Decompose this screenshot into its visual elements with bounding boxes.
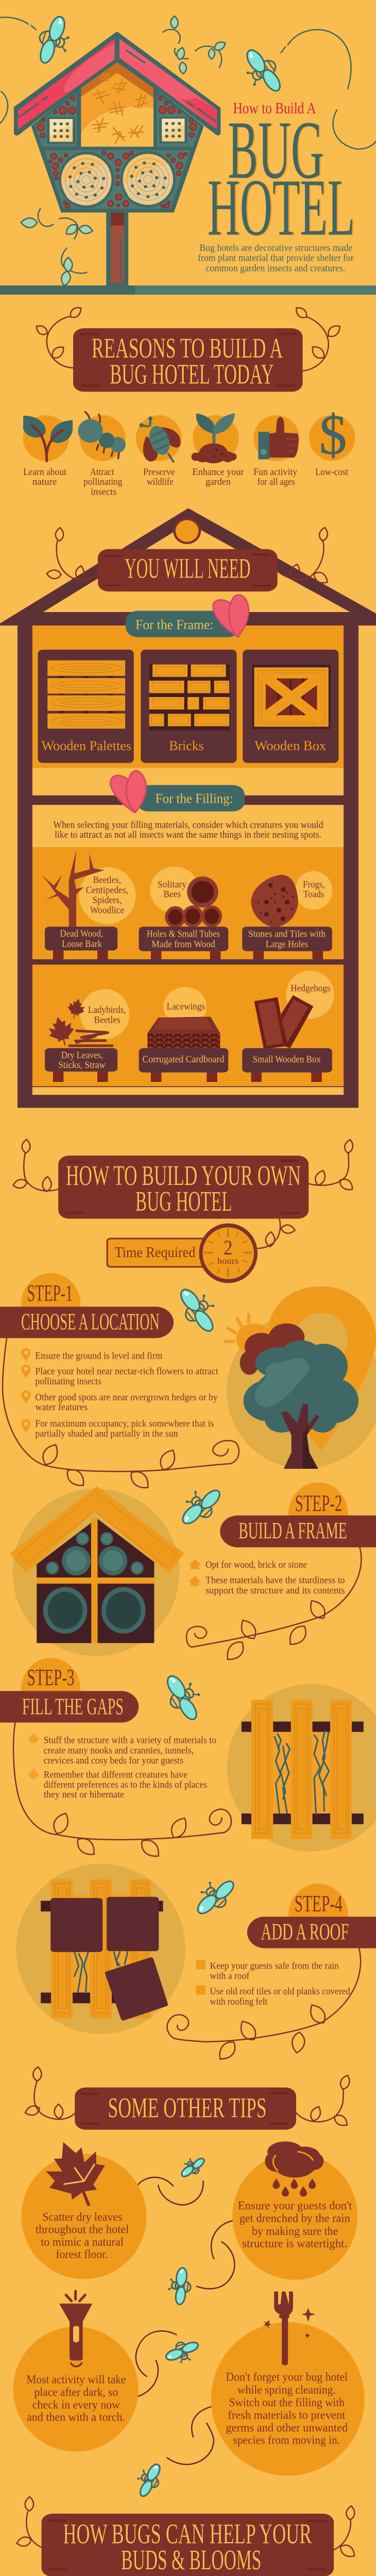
section: how to build header — [12, 1139, 355, 1283]
item: dry leaves: Ladybirds, — [88, 1005, 126, 1015]
icon: bee — [177, 2151, 208, 2181]
banner — [42, 2514, 334, 2576]
step 2 bullets: Opt for wood, brick or stone — [206, 1559, 307, 1570]
clock: 2 hours: 2 — [224, 1236, 233, 1259]
house structure — [0, 508, 376, 1108]
vine decoration — [35, 305, 343, 371]
step 1 ribbon — [0, 1307, 174, 1338]
step 3 bullets — [28, 1733, 216, 1800]
item: tubes: Holes & Small Tubes — [147, 928, 220, 940]
pill: for the frame: For the Frame: — [135, 617, 213, 632]
icon: bee — [136, 415, 182, 462]
clock: 2 hours: hours — [217, 1257, 238, 1266]
item: small box: Small Wooden Box — [253, 1054, 321, 1065]
tip: torch: place after dark, so — [35, 2386, 118, 2399]
hero section — [0, 12, 376, 295]
illustration: roof on frame — [16, 1864, 185, 2034]
step 1 vine — [3, 1338, 239, 1492]
icon: plant — [23, 415, 73, 461]
step 1 badge — [21, 1273, 80, 1336]
step 3 badge — [21, 1658, 80, 1721]
step 1: CHOOSE A LOCATION — [21, 1309, 160, 1334]
tips vine decoration — [24, 2066, 352, 2128]
tip: dry leaves: forest floor. — [56, 2248, 108, 2261]
item: tubes: Made from Wood — [151, 939, 215, 950]
clock: 2 hours — [199, 1224, 258, 1283]
card: wooden palettes — [38, 650, 134, 763]
card: wooden box: Wooden Box — [254, 738, 326, 754]
item: dry leaves: Sticks, Straw — [58, 1060, 106, 1071]
reason captions: for all ages — [258, 477, 295, 487]
item: cardboard: Lacewings — [167, 1001, 205, 1012]
illustration: filled frame — [227, 1684, 376, 1852]
item: dead wood: Beetles, — [93, 874, 121, 886]
pill: for the filling — [110, 771, 245, 812]
step 1 — [0, 1273, 376, 1492]
icon: bee — [163, 2337, 202, 2368]
item: dry leaves: Beetles — [94, 1014, 121, 1025]
step 2 vine — [186, 1547, 361, 1664]
tip: dry leaves: Scatter dry leaves — [42, 2211, 122, 2224]
item: tubes: Solitary — [158, 879, 186, 890]
item: dead wood: Woodlice — [90, 905, 124, 916]
time required label — [107, 1239, 208, 1267]
title: How to Build A — [233, 100, 316, 117]
tip: torch: check in every now — [32, 2398, 120, 2412]
card: wooden box — [243, 650, 338, 763]
step 1 bullets: Place your hotel near nectar-rich flowers to attract — [35, 1366, 218, 1377]
step 1 bullets — [21, 1348, 218, 1439]
step 1 bullets: Ensure the ground is level and firm — [35, 1350, 162, 1361]
step 3 vine — [13, 1723, 231, 1861]
reason captions: Enhance your — [192, 466, 244, 478]
item: dead wood: Loose Bark — [62, 938, 102, 950]
icon: caterpillar — [78, 412, 126, 461]
reason captions: nature — [32, 477, 57, 487]
icon: bee — [131, 2459, 167, 2500]
vine decoration — [16, 2497, 357, 2560]
banner: some other tips — [75, 2088, 296, 2130]
step 3 bullets: create many nooks and crannies, tunnels, — [44, 1745, 194, 1756]
roof — [14, 31, 220, 135]
item: tubes — [139, 867, 228, 959]
section: you will need — [0, 508, 376, 1108]
banner — [73, 328, 303, 392]
icon: flying bee top right — [236, 43, 288, 100]
reason captions: Preserve — [143, 466, 175, 478]
card: bricks: Bricks — [169, 738, 204, 754]
left window — [47, 117, 75, 144]
reason captions: Fun activity — [253, 466, 297, 478]
icon: flying bee top left — [32, 12, 76, 68]
section: reasons — [23, 305, 355, 497]
item: stones — [242, 871, 332, 959]
step 4 vine — [167, 1948, 361, 2063]
item: dead wood — [42, 850, 136, 959]
reason captions: Low-cost — [315, 466, 348, 478]
banner — [98, 549, 278, 591]
item: tubes: Bees — [164, 889, 181, 900]
step 1 bullets: pollinating insects — [35, 1376, 101, 1387]
bamboo tube dots — [38, 97, 196, 208]
step 1 bullets: partially shaded and partially in the sun — [35, 1428, 178, 1439]
item: dry leaves: Dry Leaves, — [61, 1049, 103, 1061]
step 3 ribbon: FILL THE GAPS — [22, 1693, 124, 1719]
reason captions: pollinating — [83, 477, 123, 487]
icon: bee — [158, 1668, 210, 1725]
reason captions: garden — [206, 477, 231, 487]
step 3 bullets: crevices and cosy beds for your guests — [44, 1755, 183, 1766]
step 3 bullets: Stuff the structure with a variety of materials to — [44, 1735, 216, 1746]
illustration: tree on location pin — [226, 1286, 376, 1469]
section: tips — [13, 2131, 365, 2500]
step 2 — [10, 1479, 376, 1664]
step 1 badge: STEP-1 — [27, 1280, 73, 1306]
tip: spring cleaning — [211, 2292, 365, 2476]
item: stones: Large Holes — [266, 939, 308, 950]
reason captions: insects — [91, 486, 116, 497]
item: cardboard — [139, 987, 228, 1082]
icon: bee — [172, 1281, 225, 1337]
step 4 bullets: with roofing felt — [210, 1996, 267, 2007]
icon: bee — [174, 1479, 227, 1532]
icon: sprout — [192, 413, 239, 463]
time required label: Time Required — [115, 1245, 195, 1260]
filling contents — [42, 819, 334, 1082]
reason captions: Attract — [90, 466, 114, 478]
pill: for the filling: For the Filling: — [156, 791, 233, 806]
item: stones: Frogs, — [303, 879, 325, 890]
step 4 — [16, 1864, 376, 2130]
right window — [159, 117, 187, 143]
post — [106, 213, 128, 286]
section: how bugs can help — [16, 2497, 357, 2576]
item: dead wood: Dead Wood, — [60, 928, 103, 939]
intro text — [198, 243, 354, 274]
icon: bee — [166, 2266, 193, 2306]
step 2 bullets — [189, 1559, 345, 1596]
banner: BUG HOTEL — [135, 1185, 232, 1217]
reason captions — [23, 466, 348, 497]
item: stones: Stones and Tiles with — [248, 928, 326, 940]
step 2 badge — [288, 1482, 348, 1545]
step 1 bullets: water features — [35, 1402, 88, 1413]
item: stones: Toads — [303, 889, 324, 900]
flight paths — [136, 2177, 234, 2464]
step 3 badge: STEP-3 — [27, 1665, 74, 1690]
step 3 bullets: they nest or hibernate — [44, 1789, 124, 1800]
tip: watertight — [232, 2141, 357, 2280]
leaf sprigs — [21, 16, 227, 286]
card: wooden palettes: Wooden Palettes — [42, 738, 131, 754]
icon: bee — [189, 1871, 240, 1922]
illustration: frame — [10, 1486, 184, 1656]
icon: thumbs up — [253, 415, 299, 461]
tip: dry leaves: throughout the hotel — [36, 2223, 129, 2236]
step 3 — [0, 1658, 376, 1861]
center compartment — [81, 62, 153, 147]
item: dry leaves — [45, 989, 129, 1082]
step 3 ribbon — [0, 1691, 139, 1723]
step 1 bullets: For maximum occupancy, pick somewhere that is — [35, 1418, 214, 1429]
illustration: bug hotel — [14, 31, 220, 213]
vine decoration — [12, 1139, 355, 1248]
step 1 bullets: Other good spots are near overgrown hedges or by — [35, 1392, 218, 1403]
ground strip — [0, 285, 376, 295]
tip: torch: Most activity will take — [26, 2373, 126, 2386]
log slice right — [121, 151, 176, 208]
reason captions: wildlife — [147, 477, 174, 487]
vine decoration — [46, 527, 330, 586]
step 4 badge — [288, 1884, 348, 1946]
tip: dry leaves: to mimic a natural — [41, 2235, 124, 2249]
icon: dollar: $ — [319, 403, 347, 466]
item: dead wood: Spiders, — [92, 894, 122, 906]
step 3 bullets: Remember that different creatures have — [44, 1769, 187, 1780]
tip: torch: and then with a torch. — [27, 2411, 125, 2424]
item: cardboard: Corrugated Cardboard — [143, 1054, 224, 1065]
tip: torch — [13, 2291, 139, 2452]
pill: for the frame — [126, 595, 249, 637]
card: bricks — [141, 650, 237, 763]
reason captions: Learn about — [23, 466, 66, 478]
item: small box: Hedgehogs — [290, 982, 331, 994]
item: dead wood: Centipedes, — [86, 885, 128, 895]
step 3 bullets: different preferences as to the kinds of places — [44, 1779, 207, 1790]
banner — [58, 1156, 309, 1219]
flight paths — [0, 18, 376, 149]
log slices — [59, 151, 114, 208]
step 4 bullets — [196, 1960, 350, 2007]
step 4 bullets: with a roof — [210, 1970, 249, 1981]
tip: dry leaves — [21, 2131, 146, 2279]
filling intro text — [53, 819, 323, 840]
item: small box — [242, 971, 334, 1082]
title — [208, 100, 355, 252]
